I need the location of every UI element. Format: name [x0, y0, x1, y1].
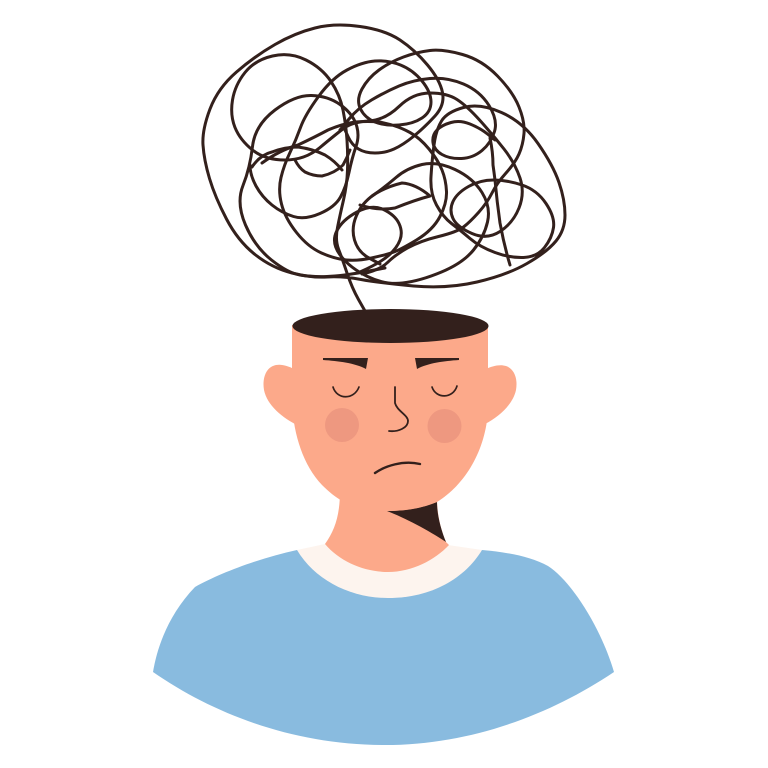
- closed eyes: [333, 386, 457, 397]
- cheeks: [325, 408, 462, 443]
- neck: [325, 490, 449, 572]
- scribble of tangled thoughts: [203, 25, 565, 311]
- eyebrows: [323, 358, 459, 369]
- head: [292, 325, 488, 511]
- shirt: [153, 544, 614, 745]
- mouth: [375, 463, 420, 473]
- nose: [389, 387, 408, 431]
- open skull: [292, 309, 488, 343]
- ears: [264, 365, 517, 426]
